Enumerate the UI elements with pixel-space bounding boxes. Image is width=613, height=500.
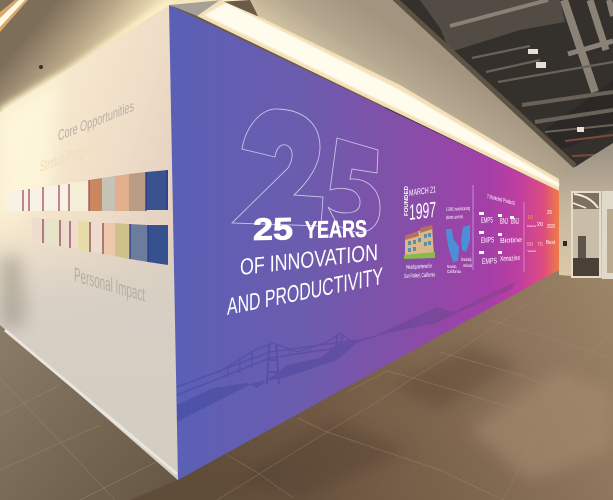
awards panel: 10 (527, 215, 533, 221)
awards panel: Years (527, 249, 537, 253)
left wall (0, 5, 178, 480)
mural wall panel (169, 5, 559, 480)
founded panel: Headquartered in (406, 264, 432, 271)
card row: bottom (32, 218, 168, 265)
founded panel: MARCH 21 (409, 184, 436, 198)
plants panel: plants across (446, 214, 463, 221)
floor (0, 260, 613, 500)
products panel: BNJ (511, 217, 519, 226)
founded panel (404, 184, 436, 280)
plants panel: Novato, (447, 264, 457, 269)
left wall: Personal Impact (74, 264, 145, 307)
ceiling camera (39, 65, 43, 69)
structural beam (394, 0, 575, 166)
ceiling (385, 0, 613, 175)
products panel: Xenazine (500, 255, 520, 263)
founded panel: 1997 (409, 197, 436, 225)
founded panel: San Rafael, California (404, 272, 435, 280)
plants panel: 5 GMC manufacturing (446, 206, 470, 213)
plants panel: Shanbally, (461, 257, 472, 262)
big outline number 25 (232, 109, 380, 232)
products panel: 7 Marketed Products (487, 193, 515, 207)
ceiling lights and sprinklers (528, 49, 584, 132)
founded panel: FOUNDED (404, 186, 410, 216)
door light switch (563, 241, 567, 246)
icon: map of California (446, 229, 459, 262)
back right wall and doorway (559, 143, 613, 279)
products panel: EMPS (481, 235, 494, 245)
awards panel: 2020 (547, 224, 555, 230)
soffit corner (170, 0, 222, 16)
products panel: EMPS (481, 215, 493, 225)
plants panel: California (447, 269, 461, 274)
left ceiling band (0, 0, 250, 118)
bridge cables and deck (177, 333, 357, 395)
icon: headquarters building (404, 225, 435, 259)
headline: AND PRODUCTIVITY (227, 263, 383, 321)
card row: top (7, 170, 168, 211)
products panel: EMPS (482, 256, 497, 266)
awards panel: 50 (527, 242, 533, 248)
products panel: BNJ (500, 217, 508, 226)
awards panel: 20 (537, 222, 543, 228)
ceiling pipes (450, 0, 613, 156)
headline (227, 211, 383, 321)
headline: 25 (253, 211, 293, 247)
headline: YEARS (305, 216, 367, 244)
product icons (479, 212, 514, 254)
awards panel: 25 (547, 210, 552, 216)
products panel: Biotine (500, 237, 522, 245)
plants panel (446, 185, 473, 274)
doorway (571, 191, 613, 279)
awards panel: Best (546, 240, 556, 246)
awards panel: Patents (527, 224, 536, 228)
awards panel (527, 210, 556, 253)
awards panel: 75 (537, 242, 543, 248)
plants panel: Ireland (463, 263, 472, 268)
headline: OF INNOVATION (240, 239, 378, 280)
wall heading: strategic progress: Stretch Progress (40, 137, 98, 176)
upper wall above light (250, 0, 575, 180)
wall heading: opportunities: Core Opportunities (58, 98, 134, 145)
skyline with bay bridge (177, 282, 517, 422)
light strip (197, 0, 559, 191)
baseboard (5, 330, 177, 474)
icon: map of Ireland (461, 225, 470, 252)
products panel (479, 193, 524, 272)
